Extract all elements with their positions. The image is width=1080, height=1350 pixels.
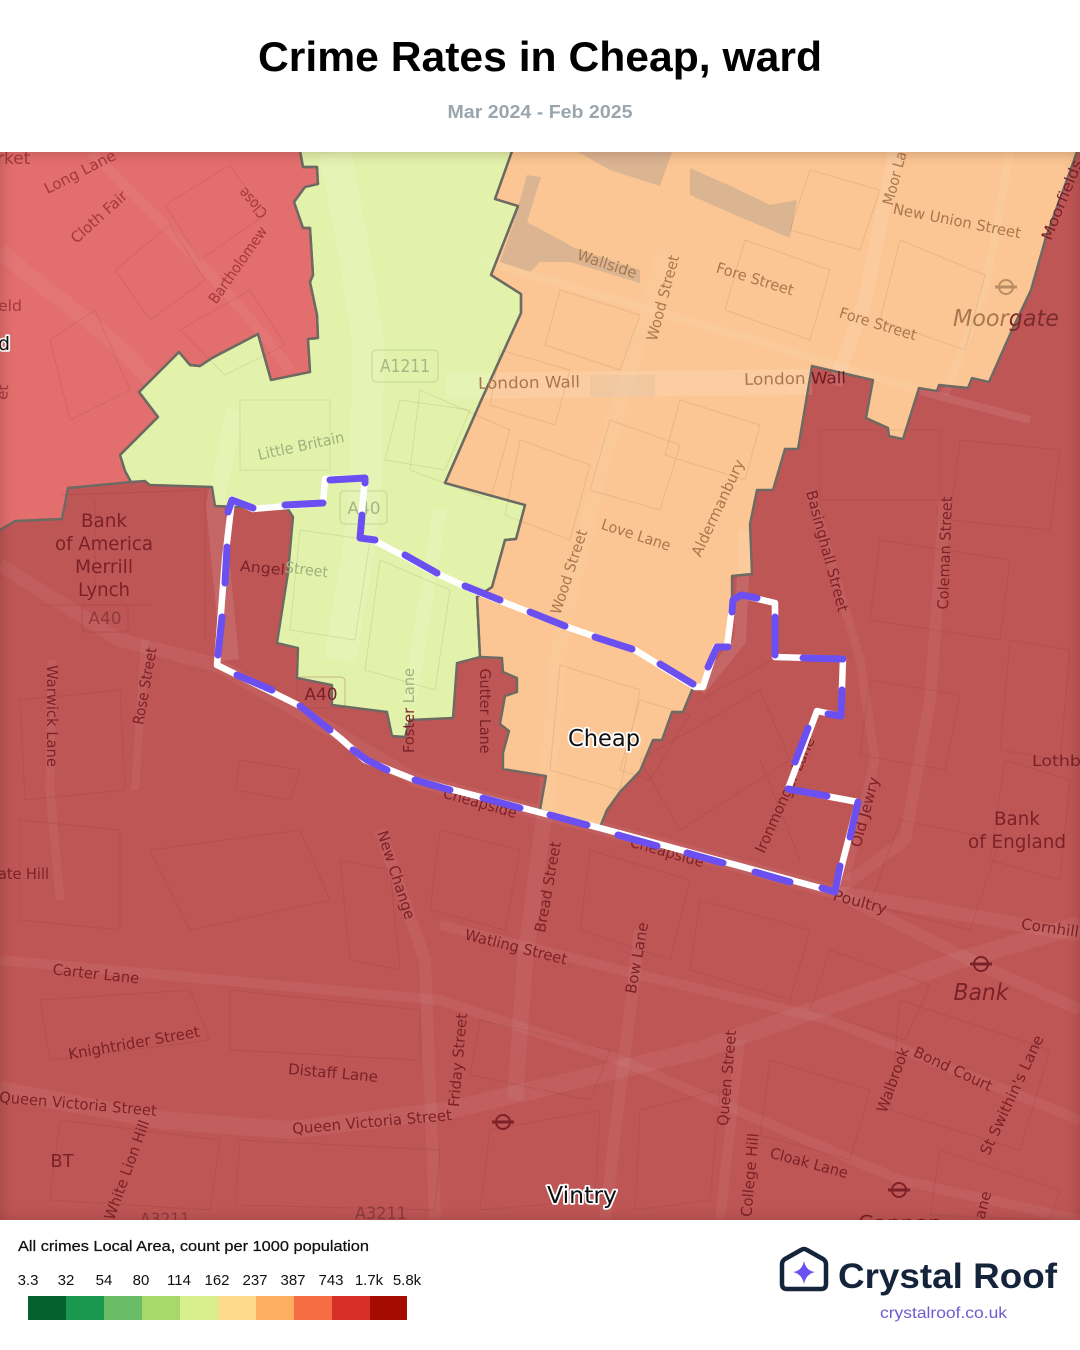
street labels: green area: Foster Lane xyxy=(400,668,418,753)
road shield: A40 west xyxy=(82,605,128,632)
road shield: A40 centre xyxy=(340,491,387,524)
legend value labels: 80 xyxy=(133,1272,149,1289)
street labels: orange area: London Wall xyxy=(478,372,580,393)
street labels: orange area: Wood Street xyxy=(547,527,591,617)
underground roundels xyxy=(492,280,1017,1197)
street labels: south and west: Angel xyxy=(239,557,286,579)
street labels: south and west: A3211 xyxy=(140,1210,190,1230)
street labels: green area xyxy=(256,428,418,753)
map background: high crime area xyxy=(0,152,1080,1220)
place label: Bank of America Merrill Lynch: Lynch xyxy=(78,579,130,601)
map edge vignette xyxy=(0,152,1080,1220)
region borders xyxy=(0,140,1080,827)
street labels: east and south-east: St Swithin's Lane xyxy=(976,1032,1048,1158)
street labels: south and west: BT xyxy=(50,1151,75,1172)
website url: crystalroof.co.uk xyxy=(880,1305,1008,1322)
street labels: east and south-east: ane xyxy=(971,1189,995,1221)
legend value labels: 54 xyxy=(96,1272,112,1289)
logo wordmark: Crystal Roof xyxy=(838,1257,1057,1296)
street labels: south and west: Warwick Lane xyxy=(43,665,61,767)
legend value labels: 237 xyxy=(242,1272,268,1289)
logo icon: house with star xyxy=(782,1249,826,1289)
street labels: north-west: Bartholomew xyxy=(205,223,271,307)
legend value labels: 162 xyxy=(204,1272,230,1289)
road shield: A1211: A1211 xyxy=(380,356,430,377)
ward boundary: Cheap xyxy=(217,478,858,892)
street labels: east and south-east: Cloak Lane xyxy=(768,1144,850,1182)
street labels: south and west: Carter Lane xyxy=(52,961,140,987)
street labels: east and south-east xyxy=(622,157,1080,1235)
legend value labels xyxy=(18,1272,422,1289)
road shield: A40 south: A40 xyxy=(304,685,338,705)
place label: Bank of America Merrill Lynch: of America xyxy=(55,533,153,555)
street labels: south and west: Distaff Lane xyxy=(287,1060,379,1086)
street labels: south and west: Friday Street xyxy=(445,1012,471,1108)
building outlines xyxy=(20,165,1070,1220)
street labels: east and south-east: Ironmonger Lane xyxy=(751,734,819,856)
street labels: south and west: Cheapside xyxy=(441,784,519,822)
street labels: south and west: White Lion Hill xyxy=(101,1118,153,1222)
legend value labels: 387 xyxy=(280,1272,306,1289)
street labels: orange area: Moor Lane xyxy=(879,133,915,207)
street labels: north-west: Close xyxy=(235,184,271,222)
legend value labels: 114 xyxy=(167,1272,191,1289)
street labels: orange area xyxy=(478,133,1023,617)
street labels: green area: Little Britain xyxy=(256,428,346,464)
street labels: east and south-east: Queen Street xyxy=(714,1029,740,1127)
street labels: south and west: Cheapside xyxy=(628,833,706,871)
street labels: orange area: Aldermanbury xyxy=(688,457,748,559)
street labels: east and south-east: Walbrook xyxy=(873,1045,913,1115)
road shield: A40 west: A40 xyxy=(88,609,122,629)
road shield: A1211 xyxy=(372,350,438,382)
street labels: orange area: London Wall xyxy=(744,368,846,389)
street labels: south and west: Knightrider Street xyxy=(67,1023,201,1063)
street labels: south and west: A3211 xyxy=(355,1204,407,1224)
street labels: south and west: Gutter Lane xyxy=(476,668,494,754)
street labels: orange area: New Union Street xyxy=(891,200,1023,242)
place label: Bank of America Merrill Lynch xyxy=(55,510,153,601)
road shield: A40 south xyxy=(297,677,345,708)
place label: Cheap: Cheap xyxy=(568,726,640,752)
road shield: A40 centre: A40 xyxy=(347,499,381,519)
station label: Moorgate: Moorgate xyxy=(953,306,1059,332)
legend value labels: 32 xyxy=(58,1272,74,1289)
street labels: orange area: Wood Street xyxy=(643,253,683,343)
street labels: north-west: Long Lane xyxy=(41,146,119,198)
street labels: green area: Street xyxy=(284,558,329,581)
street labels: east and south-east: Cornhill xyxy=(1020,915,1080,941)
street labels: north-west xyxy=(0,146,271,401)
street labels: orange area: Wallside xyxy=(575,246,639,282)
street labels: east and south-east: Poultry xyxy=(831,886,889,918)
place label: Vintry: Vintry xyxy=(547,1183,617,1209)
legend value labels: 5.8k xyxy=(393,1272,422,1289)
station label: Bank: Bank xyxy=(954,980,1010,1006)
street labels: east and south-east: Bond Court xyxy=(911,1043,995,1095)
region: green area xyxy=(120,140,525,737)
street labels: south and west: Queen Victoria Street xyxy=(0,1088,158,1120)
street labels: south and west: Queen Victoria Street xyxy=(292,1106,453,1138)
street labels: east and south-east: Bow Lane xyxy=(622,921,652,995)
place label: Bank of England xyxy=(969,811,1064,852)
place label: Bank of England: of England xyxy=(968,831,1066,853)
orange area darker blocks xyxy=(500,152,797,397)
street labels: east and south-east: Old Jewry xyxy=(847,775,883,849)
street labels: orange area: Fore Street xyxy=(837,304,919,344)
street labels: orange area: Love Lane xyxy=(599,515,673,555)
street labels: south and west: Rose Street xyxy=(129,646,161,726)
street labels: south and west xyxy=(0,557,706,1230)
legend title: All crimes Local Area, count per 1000 population xyxy=(18,1238,369,1255)
legend value labels: 743 xyxy=(318,1272,344,1289)
region: orange area xyxy=(445,140,1080,827)
street labels: east and south-east: Coleman Street xyxy=(934,496,956,610)
place label: Bank of America Merrill Lynch: Bank xyxy=(81,510,127,532)
legend colour scale xyxy=(28,1296,407,1320)
street labels: east and south-east: Cannon xyxy=(858,1211,942,1235)
place label: Bank of England: Bank xyxy=(994,808,1040,830)
street labels: east and south-east: College Hill xyxy=(737,1132,763,1218)
street network xyxy=(140,152,1080,1122)
place label: Bank of America Merrill Lynch: Merrill xyxy=(75,556,133,578)
subtitle: date range: Mar 2024 - Feb 2025 xyxy=(448,102,632,122)
legend value labels: 1.7k xyxy=(355,1272,384,1289)
street labels: south and west: Bread Street xyxy=(531,840,565,934)
region: red area north-west xyxy=(0,140,318,533)
street labels: south and west: Watling Street xyxy=(463,926,569,968)
legend value labels: 3.3 xyxy=(18,1272,38,1289)
street labels: north-west: Cloth Fair xyxy=(67,186,132,247)
street labels: orange area: Fore Street xyxy=(714,259,796,299)
title: Crime Rates in Cheap, ward xyxy=(258,33,822,80)
street labels: south and west: New Change xyxy=(373,828,419,922)
street labels: east and south-east: Basinghall Street xyxy=(802,488,852,614)
